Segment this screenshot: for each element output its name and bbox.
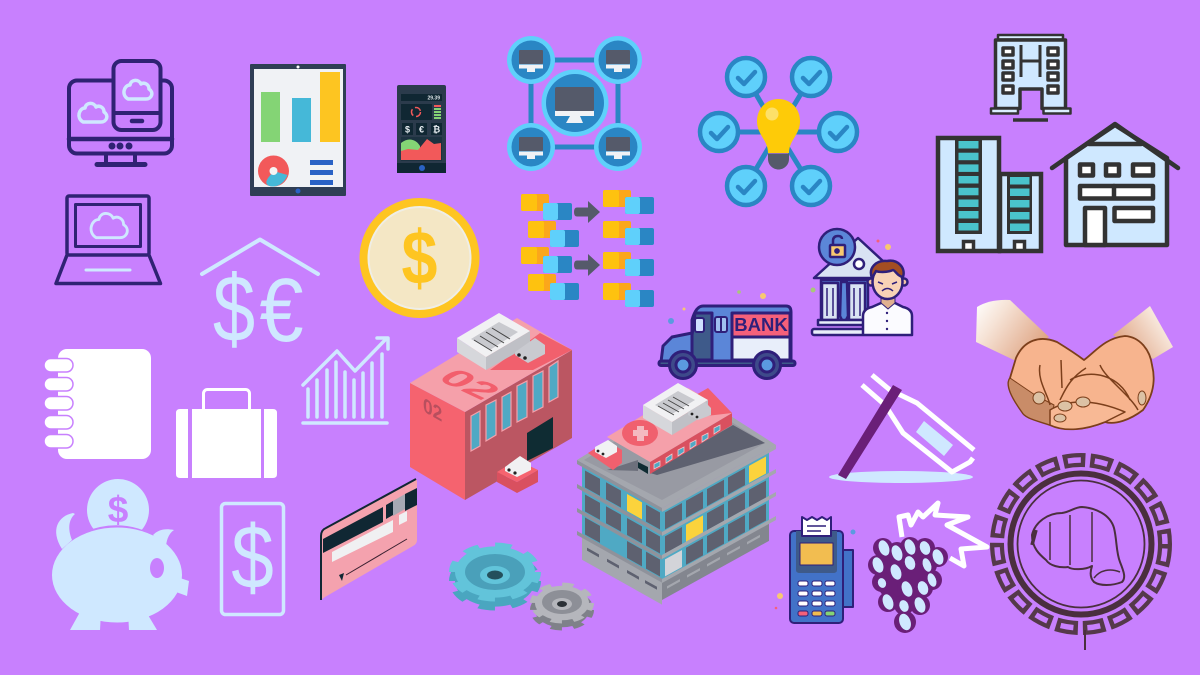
roof vent	[457, 313, 530, 370]
icon: trading phone: 29.39	[427, 96, 440, 102]
icon: white briefcase	[176, 390, 277, 478]
icon: trading phone: $	[405, 124, 410, 134]
sparkles around bank icons	[668, 240, 891, 609]
icon: growth line chart	[303, 338, 388, 423]
air unit	[515, 338, 545, 363]
icon: hotel building	[991, 35, 1070, 120]
icon: fist in chain medallion	[997, 460, 1165, 650]
icon: bank van: BANK	[734, 314, 788, 335]
icon: monitor network	[507, 36, 642, 171]
small annex	[497, 456, 538, 493]
icon: hospital isometric building	[577, 383, 776, 605]
icon: house building	[1052, 124, 1178, 245]
icon: tower blocks	[938, 138, 1041, 251]
icon: red O2 isometric building	[410, 313, 572, 500]
icon: trading phone	[397, 85, 446, 173]
fist	[1032, 507, 1124, 585]
icon: trading phone: €	[419, 124, 424, 134]
outer nodes	[507, 36, 642, 171]
person	[863, 261, 912, 335]
icon: tablet with bar chart	[250, 64, 346, 196]
pink wing	[588, 388, 732, 474]
icon: locked bank and worried person	[812, 229, 912, 335]
padlock	[819, 229, 855, 265]
icon: piggy bank	[52, 479, 189, 630]
left facade	[577, 460, 662, 605]
flat roof	[577, 390, 776, 508]
icon: grey gear	[535, 586, 589, 627]
icon: gold dollar coin	[360, 198, 480, 318]
icon: cloud desktop and phone	[69, 61, 172, 164]
hospital vent	[643, 383, 708, 435]
bars	[261, 72, 340, 142]
roof	[410, 318, 572, 412]
wall lettering: 02	[423, 394, 442, 427]
icon: payment terminal	[790, 517, 853, 623]
list lines	[310, 160, 333, 185]
icon: piggy bank: $	[108, 489, 129, 530]
icon: trading phone: ₿	[433, 124, 440, 134]
icon: grapes with white spark	[868, 503, 987, 633]
icon: cupped hands	[976, 300, 1173, 429]
icon: credit card	[321, 479, 417, 600]
walls	[410, 350, 572, 500]
icon: data blocks transformation	[521, 190, 654, 307]
icon: lightbulb idea network	[700, 58, 857, 205]
icon: bank van	[659, 306, 795, 378]
roof lettering: 02	[429, 364, 510, 404]
icon: teal gear	[455, 546, 535, 607]
bank	[812, 238, 884, 335]
icon: gold dollar coin: $	[402, 215, 437, 300]
door	[527, 417, 553, 461]
arrows	[574, 201, 600, 276]
windows	[471, 361, 558, 451]
right facade	[662, 445, 776, 600]
icon: house with dollar and euro: €	[259, 259, 304, 360]
central node	[542, 70, 608, 136]
bulb	[757, 99, 800, 170]
pie chart	[258, 156, 289, 186]
icon: dollar bill outline: $	[231, 506, 274, 607]
icon: fallen bottle and stick	[829, 375, 974, 483]
icon: house with dollar and euro	[202, 240, 318, 362]
icon: white notebook	[44, 349, 151, 459]
icon: dollar bill outline	[222, 504, 284, 614]
icon: cloud laptop	[56, 196, 160, 284]
hospital air units	[595, 402, 711, 458]
icon: house with dollar and euro: $	[213, 256, 255, 362]
